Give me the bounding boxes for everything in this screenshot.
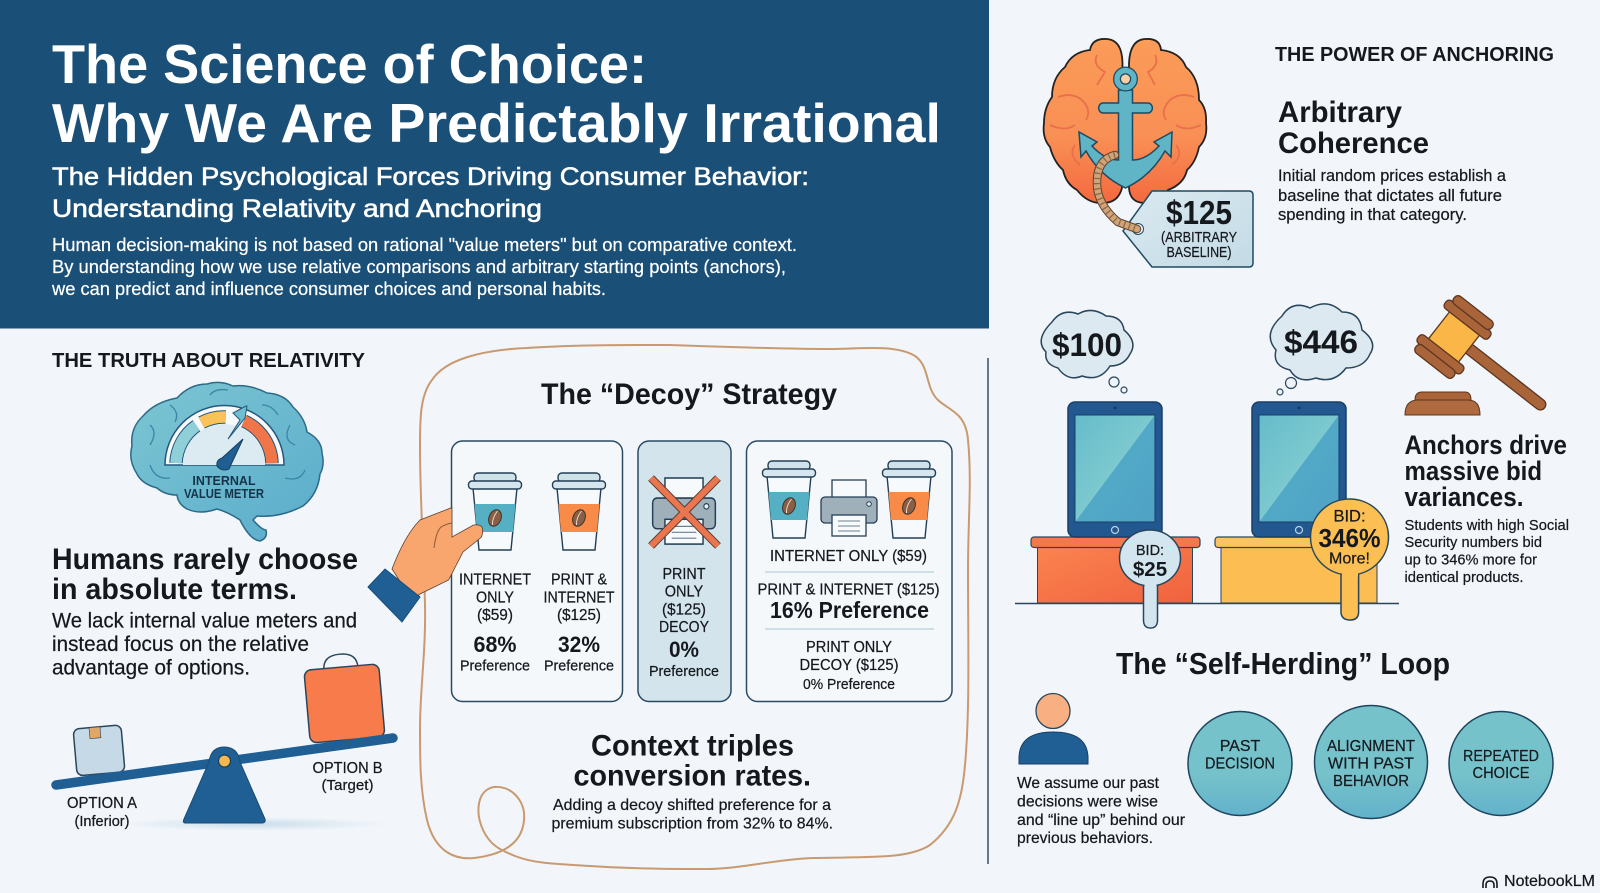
panel: anchoring — [1015, 39, 1569, 847]
subtitle: The Hidden Psychological Forces Driving Consumer Behavior: — [52, 163, 809, 191]
thought bubble: $100 — [1041, 310, 1133, 393]
loop circle: alignment with past behavior — [1314, 706, 1428, 818]
subtitle: Understanding Relativity and Anchoring — [52, 195, 542, 223]
panel: header — [0, 0, 989, 328]
labels: print and internet: ($125) — [557, 607, 601, 624]
icon: tablet high — [1252, 402, 1346, 537]
chart: seesaw with options: (Inferior) — [74, 814, 130, 830]
logo: NotebookLM: NotebookLM — [1504, 873, 1595, 890]
box: first option set — [452, 441, 622, 702]
bid paddle: $25: BID: — [1136, 543, 1164, 559]
body text: instead focus on the relative — [52, 633, 309, 656]
icon: brain with internal value meter: INTERNAL — [192, 474, 256, 488]
body text: arbitrary coherence — [1278, 167, 1507, 224]
thought bubble: $446: $446 — [1284, 324, 1358, 360]
labels: print only decoy — [649, 566, 719, 680]
icon: price tag: (ARBITRARY — [1161, 230, 1237, 246]
text: self-herding explanation: We assume our past — [1017, 775, 1160, 792]
labels: results with decoy: PRINT ONLY — [806, 639, 892, 656]
labels: internet only: Preference — [460, 658, 530, 674]
loop circle: past decision — [1188, 712, 1292, 816]
heading: humans rarely choose: in absolute terms. — [52, 573, 297, 606]
podium: low anchor — [1031, 537, 1200, 603]
icon: box option A — [73, 725, 125, 776]
loop circle: alignment with past behavior: ALIGNMENT — [1327, 738, 1415, 755]
labels: print only decoy: Preference — [649, 664, 719, 680]
labels: internet only: ($59) — [477, 607, 513, 624]
heading: context triples: Context triples — [591, 730, 794, 762]
icon: printer — [821, 480, 877, 536]
body text: arbitrary coherence: spending in that category. — [1278, 206, 1467, 224]
labels: results with decoy: PRINT & INTERNET ($125) — [758, 582, 940, 598]
body text: bid variances: Students with high Social — [1404, 517, 1569, 534]
icon: person — [1019, 694, 1088, 764]
thought bubble: $446 — [1270, 304, 1373, 395]
labels: results with decoy — [758, 548, 940, 693]
labels: results with decoy: 16% Preference — [770, 597, 929, 623]
labels: print and internet: PRINT & — [551, 572, 608, 588]
ground line — [1015, 602, 1399, 604]
labels: internet only: INTERNET — [459, 572, 531, 588]
icon: price tag: BASELINE) — [1166, 245, 1232, 261]
box: with decoy result — [746, 441, 952, 702]
intro text: Human decision-making is not based on rational "value meters" but on comparative context. — [52, 235, 797, 255]
heading: context triples: conversion rates. — [574, 760, 811, 792]
icon: hand picking cup — [368, 508, 483, 622]
icon: anchor — [1079, 70, 1172, 188]
loop circle: past decision: DECISION — [1205, 756, 1275, 772]
icon: price tag: $125 — [1166, 194, 1232, 231]
text: self-herding explanation: decisions were wise — [1017, 794, 1158, 810]
heading: arbitrary coherence: Coherence — [1278, 127, 1429, 160]
title — [52, 33, 941, 154]
labels: print only decoy: DECOY — [659, 619, 709, 636]
icon: brain with anchor and price tag — [1044, 39, 1253, 267]
icon: cup internet only — [468, 473, 522, 550]
body text: bid variances — [1404, 517, 1569, 586]
chart: seesaw with options: OPTION B — [312, 760, 382, 777]
labels: results with decoy: 0% Preference — [803, 677, 895, 693]
labels: internet only — [459, 572, 531, 674]
heading: anchors drive bid variances: massive bid — [1404, 456, 1542, 486]
body text: bid variances: identical products. — [1404, 569, 1524, 586]
intro text: By understanding how we use relative comparisons and arbitrary starting points (anchors), — [52, 257, 786, 277]
loop circle: repeated choice: REPEATED — [1463, 748, 1539, 765]
intro text: we can predict and influence consumer choices and personal habits. — [51, 279, 606, 299]
body text: arbitrary coherence: baseline that dictates all future — [1278, 187, 1502, 205]
labels: print and internet — [544, 572, 615, 674]
icon: orange brain — [1044, 39, 1206, 203]
title: Why We Are Predictably Irrational — [52, 92, 941, 154]
body text: advantage of options. — [52, 656, 250, 680]
heading: anchors drive bid variances: Anchors drive — [1404, 430, 1567, 460]
bid paddle: 346% more: BID: — [1333, 508, 1366, 526]
bid paddle: $25: $25 — [1133, 558, 1167, 581]
heading: humans rarely choose — [52, 543, 358, 606]
labels: print only decoy: ONLY — [665, 584, 703, 600]
icon: crossed out printer — [651, 478, 718, 546]
icon: bag option B — [303, 651, 385, 743]
labels: internet only: 68% — [474, 632, 516, 657]
podium: high anchor — [1215, 537, 1377, 603]
labels: internet only: ONLY — [476, 590, 514, 606]
heading: arbitrary coherence — [1278, 96, 1429, 160]
text: self-herding explanation: previous behaviors. — [1017, 830, 1153, 847]
icon: price tag — [1097, 155, 1253, 267]
icon: brain with internal value meter: VALUE METER — [184, 487, 264, 501]
icon: brain with internal value meter — [131, 382, 323, 541]
loop circle: repeated choice — [1449, 712, 1553, 816]
bid paddle: 346% more — [1310, 499, 1388, 620]
loop circle: repeated choice: CHOICE — [1472, 765, 1530, 782]
subtitle — [52, 163, 809, 223]
labels: print only decoy: PRINT — [662, 566, 706, 583]
heading: anchors drive bid variances — [1404, 430, 1567, 512]
panel: decoy strategy — [368, 345, 970, 869]
heading: the power of anchoring: THE POWER OF ANCHORING — [1275, 43, 1554, 66]
bid paddle: $25 — [1120, 530, 1180, 628]
text: self-herding explanation: and “line up” behind our — [1017, 812, 1185, 829]
labels: print only decoy: ($125) — [662, 602, 706, 618]
body text — [52, 610, 357, 680]
heading: humans rarely choose: Humans rarely choose — [52, 543, 358, 576]
labels: print and internet: 32% — [558, 632, 600, 657]
labels: print and internet: INTERNET — [544, 590, 615, 606]
title: The Science of Choice: — [52, 33, 647, 95]
icon: cup print and internet — [882, 461, 936, 538]
labels: results with decoy: INTERNET ONLY ($59) — [770, 548, 927, 565]
loop circle: alignment with past behavior: WITH PAST — [1328, 756, 1414, 772]
heading: context triples — [574, 730, 811, 792]
icon: tablet low — [1068, 402, 1162, 537]
heading: decoy strategy: The “Decoy” Strategy — [541, 378, 837, 411]
panel: relativity — [52, 349, 393, 831]
intro text — [51, 235, 797, 299]
heading: anchors drive bid variances: variances. — [1404, 482, 1524, 512]
heading: arbitrary coherence: Arbitrary — [1278, 96, 1402, 129]
thought bubble: $100: $100 — [1052, 327, 1122, 363]
body text: We lack internal value meters and — [52, 610, 357, 632]
text: decoy result: premium subscription from 32% to 84%. — [552, 816, 833, 832]
box: decoy option — [638, 441, 731, 702]
bid paddle: 346% more: More! — [1329, 550, 1370, 568]
body text: bid variances: up to 346% more for — [1404, 552, 1537, 568]
chart: seesaw with options: OPTION A — [67, 795, 138, 812]
icon: gavel — [1405, 291, 1567, 436]
labels: results with decoy: DECOY ($125) — [800, 657, 898, 674]
loop circle: past decision: PAST — [1220, 738, 1261, 755]
labels: print only decoy: 0% — [669, 637, 699, 662]
heading: the truth about relativity: THE TRUTH ABOUT RELATIVITY — [52, 349, 365, 372]
icon: cup internet only — [762, 461, 816, 538]
text: self-herding explanation — [1017, 775, 1185, 847]
chart: auction comparison — [1015, 291, 1567, 628]
bid paddle: 346% more: 346% — [1318, 523, 1380, 553]
text: decoy result — [552, 797, 833, 832]
text: decoy result: Adding a decoy shifted preference for a — [553, 797, 831, 814]
body text: bid variances: Security numbers bid — [1404, 534, 1542, 551]
chart: seesaw with options: (Target) — [322, 778, 374, 794]
loop circle: alignment with past behavior: BEHAVIOR — [1333, 773, 1409, 790]
decorative hand-drawn outline — [420, 345, 970, 869]
chart: seesaw with options — [56, 651, 393, 831]
labels: print and internet: Preference — [544, 658, 614, 674]
body text: arbitrary coherence: Initial random prices establish a — [1278, 167, 1507, 185]
heading: self-herding loop: The “Self-Herding” Loop — [1116, 646, 1450, 681]
icon: cup print and internet — [552, 473, 606, 550]
